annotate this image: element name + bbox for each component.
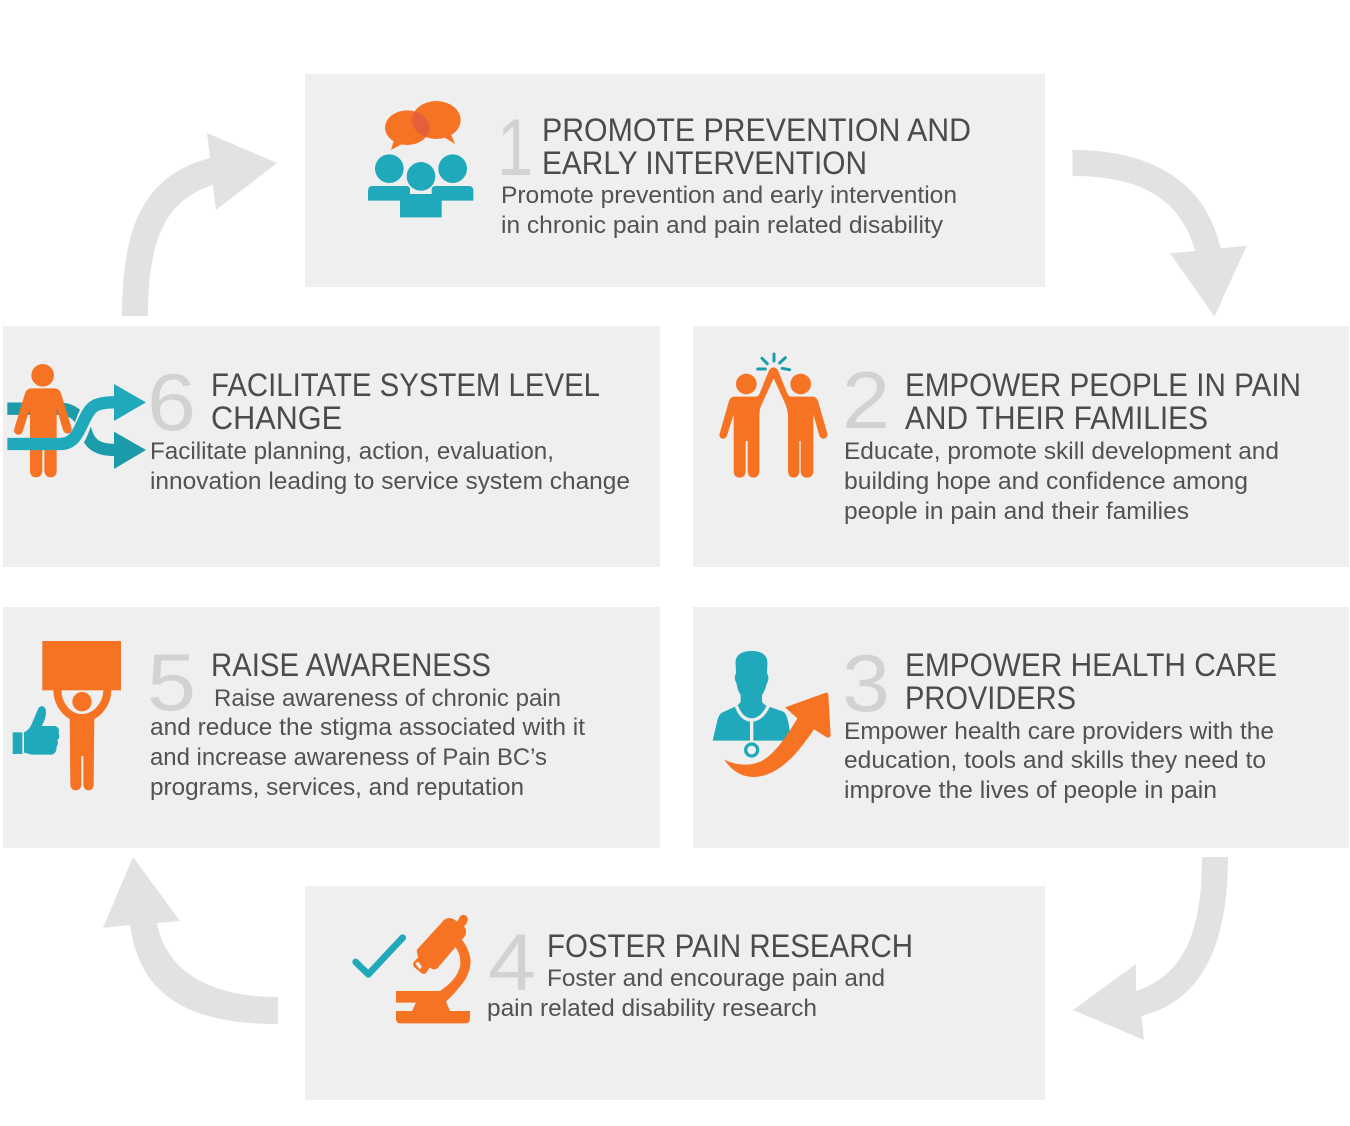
heading: FOSTER PAIN RESEARCH xyxy=(547,928,913,964)
icon: doctor with rising arrow xyxy=(713,651,831,777)
number 1: 1 xyxy=(497,103,533,193)
body text: people in pain and their families xyxy=(844,498,1189,525)
heading xyxy=(905,367,1301,436)
number 3: 3 xyxy=(842,639,890,729)
icon: checkmark and microscope xyxy=(356,915,471,1023)
panel 5: raise awareness xyxy=(3,607,660,848)
icon: two people high-five xyxy=(719,354,827,478)
body text xyxy=(501,182,957,239)
heading xyxy=(905,647,1277,716)
heading: AND THEIR FAMILIES xyxy=(905,400,1208,436)
body text: building hope and confidence among xyxy=(844,468,1248,495)
body text: Facilitate planning, action, evaluation, xyxy=(150,438,554,465)
body text: pain related disability research xyxy=(487,995,817,1022)
body text: and increase awareness of Pain BC’s xyxy=(150,744,547,771)
icon: person holding sign with thumbs up xyxy=(13,641,121,790)
panel 1: promote prevention xyxy=(305,74,1045,287)
body text: programs, services, and reputation xyxy=(150,774,524,801)
icon: person with crossing arrows xyxy=(7,364,146,477)
body text: Empower health care providers with the xyxy=(844,718,1274,745)
heading: CHANGE xyxy=(211,400,342,436)
body text: Promote prevention and early intervention xyxy=(501,182,957,209)
body text xyxy=(150,685,585,801)
heading: RAISE AWARENESS xyxy=(211,647,491,683)
number 5: 5 xyxy=(147,638,196,728)
heading: EMPOWER HEALTH CARE xyxy=(905,647,1277,683)
body text: Educate, promote skill development and xyxy=(844,438,1279,465)
heading: EMPOWER PEOPLE IN PAIN xyxy=(905,367,1301,403)
body text: education, tools and skills they need to xyxy=(844,747,1266,774)
panel 6: facilitate system level change xyxy=(3,326,660,567)
body text: improve the lives of people in pain xyxy=(844,777,1217,804)
heading: PROVIDERS xyxy=(905,680,1076,716)
number 4: 4 xyxy=(488,918,536,1008)
body text: and reduce the stigma associated with it xyxy=(150,714,585,741)
arrow: panel 3 to panel 4 xyxy=(1073,857,1228,1040)
panel 2: empower people in pain xyxy=(693,326,1349,567)
number 6: 6 xyxy=(147,358,196,448)
body text: Raise awareness of chronic pain xyxy=(214,685,561,712)
arrow: panel 6 to panel 1 xyxy=(122,133,277,316)
heading: FACILITATE SYSTEM LEVEL xyxy=(211,367,600,403)
arrow: panel 1 to panel 2 xyxy=(1072,150,1247,316)
heading: PROMOTE PREVENTION AND xyxy=(542,112,971,148)
number 2: 2 xyxy=(842,356,890,446)
body text xyxy=(844,718,1274,804)
body text: Foster and encourage pain and xyxy=(547,965,885,992)
panel 3: empower health care providers xyxy=(693,607,1349,848)
heading xyxy=(211,367,600,436)
body text: in chronic pain and pain related disability xyxy=(501,212,943,239)
heading: EARLY INTERVENTION xyxy=(542,145,867,181)
body text: innovation leading to service system change xyxy=(150,468,630,495)
heading xyxy=(542,112,971,181)
body text xyxy=(487,965,885,1022)
icon: group with speech bubbles xyxy=(368,101,473,217)
body text xyxy=(844,438,1279,525)
body text xyxy=(150,438,630,495)
panel 4: foster pain research xyxy=(305,886,1045,1100)
arrow: panel 4 to panel 5 xyxy=(103,857,278,1024)
